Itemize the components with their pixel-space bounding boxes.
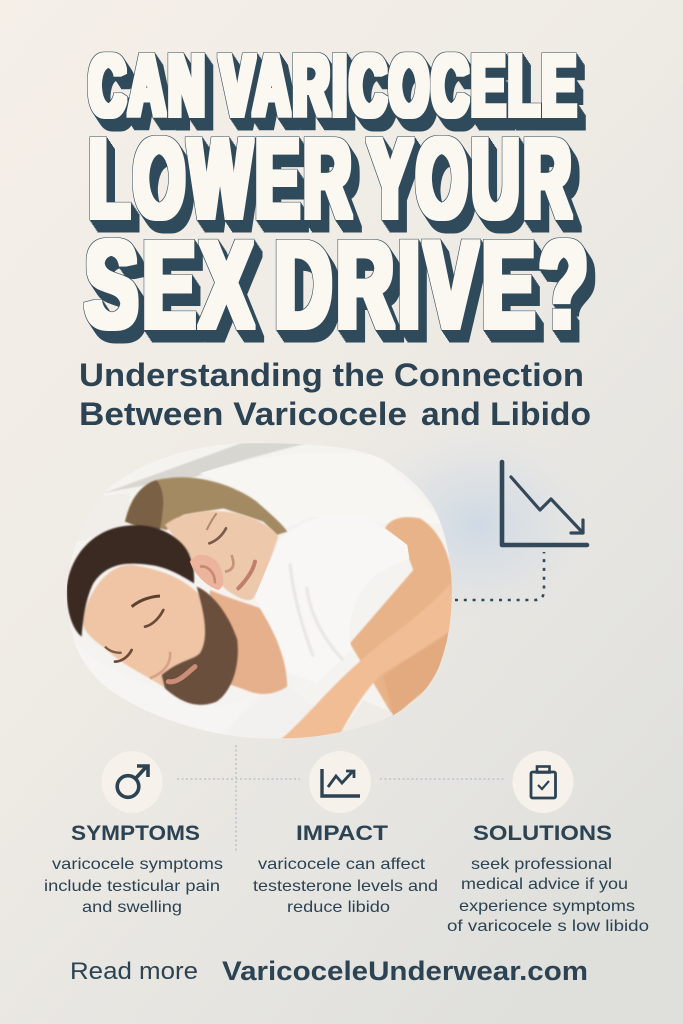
subtitle: Between Varicocele [79, 396, 407, 432]
photo: sleeping couple in an organic blob [66, 443, 452, 738]
panel: solutions [447, 751, 649, 935]
man's hair [67, 525, 194, 637]
text: symptoms description: include testicular pain [44, 878, 220, 895]
heading: impact: IMPACT [296, 822, 388, 845]
man's eyes, brows and nose [145, 610, 163, 627]
headboard wedge [108, 443, 303, 492]
woman arm [350, 517, 455, 717]
title [85, 38, 592, 354]
text: solutions description [447, 856, 649, 935]
lower shirt and sheet [217, 687, 313, 743]
pillow top right [200, 464, 440, 522]
man's neck and shoulder [207, 590, 287, 694]
text: impact description [253, 856, 438, 916]
subtitle [79, 357, 591, 432]
subtitle: Understanding the Connection [79, 357, 584, 393]
dotted connector: photo to chart [455, 552, 544, 600]
panel: impact [253, 751, 438, 916]
heading: symptoms: SYMPTOMS [71, 822, 200, 845]
pillow lower left [63, 633, 257, 743]
heading: solutions: SOLUTIONS [473, 822, 612, 845]
text: solutions description: experience symptoms [459, 898, 635, 915]
man's beard [162, 587, 238, 705]
woman eye, nose and lips [209, 528, 226, 543]
chart-down icon [502, 462, 587, 545]
woman shirt [255, 528, 410, 647]
shirt folds [290, 563, 343, 660]
man's face [82, 564, 206, 688]
icon: male symbol [102, 751, 162, 813]
footer: read more: Read more [70, 958, 198, 985]
text: impact description: testesterone levels and [253, 878, 438, 895]
icon: clipboard check [512, 751, 574, 813]
footer: website: VaricoceleUnderwear.com [222, 956, 588, 986]
text: impact description: varicocele can affect [258, 856, 426, 873]
woman hair [125, 477, 287, 535]
text: symptoms description [44, 856, 223, 916]
man's mouth and chin [168, 667, 195, 682]
text: symptoms description: varicocele symptoms [52, 856, 223, 873]
text: solutions description: of varicocele s low libido [447, 918, 649, 935]
text: solutions description: medical advice if you [461, 876, 628, 893]
subtitle: and Libido [421, 396, 591, 432]
text: solutions description: seek professional [471, 856, 612, 873]
man's arm [280, 583, 455, 742]
background glow behind chart [353, 420, 603, 630]
text: symptoms description: and swelling [82, 899, 182, 916]
woman face [165, 511, 278, 600]
icon: rising chart [309, 751, 371, 813]
section connectors (dotted) [177, 745, 505, 853]
text: impact description: reduce libido [287, 899, 390, 916]
man's ear [190, 555, 223, 590]
panel: symptoms [44, 751, 223, 916]
